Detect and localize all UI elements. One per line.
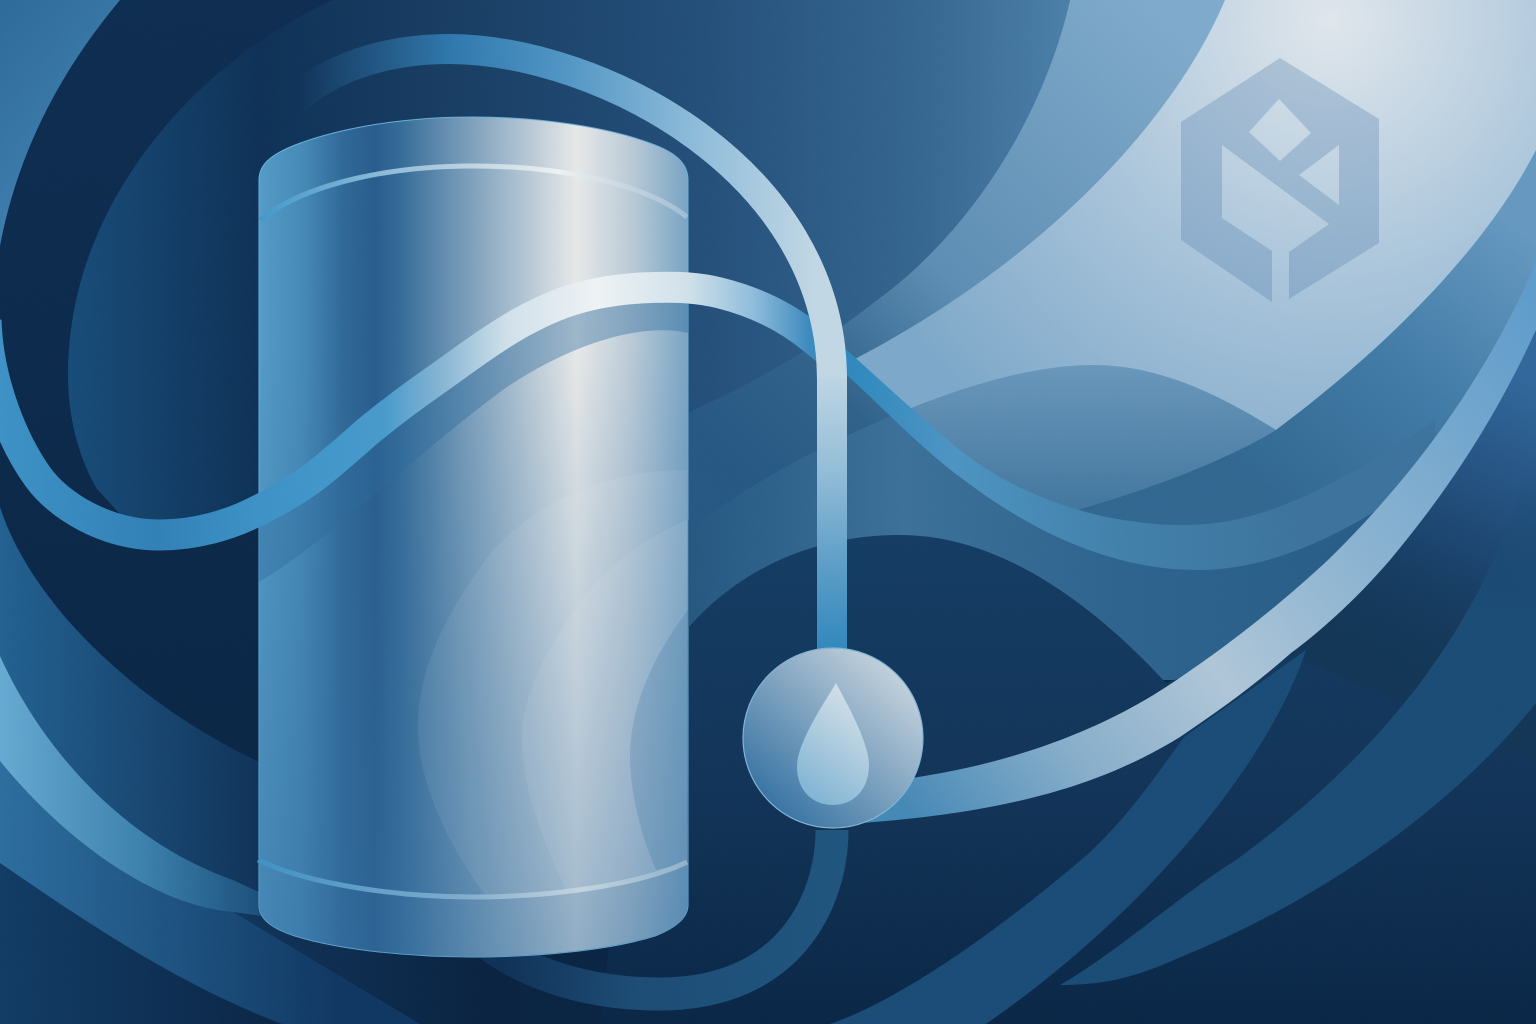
cylinder lower ring [258, 860, 687, 897]
icon: water drop [797, 683, 869, 805]
background: bottom-right band A [830, 650, 1306, 1024]
cylinder vertical shading [259, 117, 688, 957]
cylinder lower swoosh three [630, 610, 688, 870]
cylinder lower swoosh one [418, 470, 687, 895]
background: bottom-left dark arc [0, 507, 520, 1024]
pipe: upper arch behind the cylinder [290, 49, 832, 380]
background: bottom-right band B [1060, 430, 1536, 985]
valve: water drop dial [743, 648, 923, 828]
logo: hexagon tulip watermark [1181, 58, 1379, 302]
pipe: wave ribbon left part [0, 287, 832, 535]
background: inner swirl and top tone [68, 0, 1070, 525]
pipe: vertical drop [817, 378, 847, 655]
pipe: lower loop behind the cylinder [490, 830, 832, 994]
background: band under light sweep [1040, 150, 1536, 570]
background: dark hill [600, 535, 1536, 1024]
cylinder lower swoosh two [522, 520, 687, 890]
background: area right of ribbon, highlight [1290, 300, 1536, 760]
valve circle [743, 648, 923, 828]
background: mid band [689, 0, 1536, 640]
background: area right of ribbon, solid [1290, 300, 1536, 760]
background: bottom-left light arc [0, 656, 330, 925]
background: bottom-left blue arc [0, 761, 420, 1024]
cylinder [258, 117, 688, 957]
background: pale hill [689, 365, 1276, 560]
cylinder body [259, 117, 688, 957]
pipe: arch section in front of wave [689, 112, 847, 378]
cylinder upper ring [260, 166, 687, 220]
pipe: right ribbon [860, 262, 1536, 823]
background: light sweep [847, 0, 1536, 520]
pipe: wave ribbon right part [806, 320, 1435, 570]
background: area below wave [689, 410, 1536, 680]
background: bottom-left corner [0, 863, 283, 1024]
background: top-left corner band [0, 0, 120, 246]
cylinder shaded band below wave [259, 287, 688, 582]
